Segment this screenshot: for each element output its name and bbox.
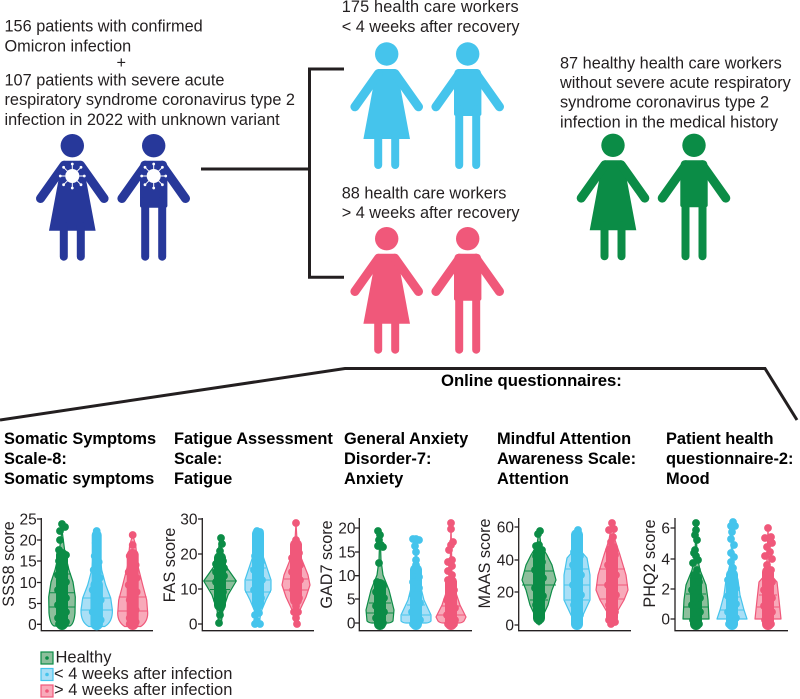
chart: SSS8 violin plot: 15 <box>20 554 37 570</box>
chart: GAD7 violin plot: GAD7 score <box>318 520 336 609</box>
chart: MAAS violin plot: 60 <box>497 520 514 536</box>
heading: fatigue: Fatigue <box>174 470 232 488</box>
chart: FAS violin plot: 0 <box>189 616 198 634</box>
icon: infected woman <box>41 134 104 257</box>
heading: attention: Mindful Attention <box>497 430 631 448</box>
chart: SSS8 violin plot: 20 <box>20 532 37 550</box>
chart: GAD7 violin plot <box>318 518 472 632</box>
trapezoid connector <box>0 368 797 420</box>
heading: mood: Patient health <box>666 430 773 448</box>
chart: SSS8 violin plot: 25 <box>20 512 37 528</box>
icon: green man <box>662 134 726 256</box>
chart: FAS violin plot <box>161 512 314 634</box>
text: recent recovery group: < 4 weeks after recovery <box>342 18 520 36</box>
chart: GAD7 violin plot: 20 <box>338 520 356 538</box>
icon: light blue man <box>436 42 500 165</box>
chart: PHQ2 violin plot: 0 <box>661 612 670 628</box>
legend item: healthy: Healthy <box>56 649 112 667</box>
legend <box>41 649 232 699</box>
chart: GAD7 violin plot: 0 <box>347 616 356 632</box>
text: infected patients description: respiratory syndrome coronavirus type 2 <box>4 91 295 109</box>
chart: GAD7 violin plot: 5 <box>347 592 356 608</box>
icon: pink man <box>436 227 500 350</box>
chart: FAS violin plot: 10 <box>180 582 198 598</box>
heading: online questionnaires: Online questionnaires: <box>441 371 622 390</box>
chart: GAD7 violin plot: 10 <box>338 568 356 585</box>
text: healthy group: syndrome coronavirus type 2 <box>560 94 769 112</box>
heading: mood: questionnaire-2: <box>666 450 794 468</box>
bracket connector <box>201 69 344 277</box>
legend item: under 4 weeks: < 4 weeks after infection <box>54 665 232 683</box>
chart: PHQ2 violin plot <box>641 518 788 631</box>
chart: MAAS violin plot: 0 <box>505 618 514 634</box>
chart: MAAS violin plot <box>476 518 631 634</box>
heading: fatigue: Scale: <box>174 450 222 468</box>
heading: anxiety: Anxiety <box>344 470 404 488</box>
heading: attention: Awareness Scale: <box>497 450 636 468</box>
text: infected patients description: + <box>116 54 126 72</box>
text: infected patients description: 107 patients with severe acute <box>4 72 224 90</box>
chart: MAAS violin plot: MAAS score <box>476 519 494 608</box>
icon: green woman <box>581 134 645 256</box>
text: healthy group: without severe acute respiratory <box>559 74 792 92</box>
chart: SSS8 violin plot: 0 <box>28 617 37 634</box>
chart: SSS8 violin plot: 10 <box>20 575 37 592</box>
legend item: over 4 weeks: > 4 weeks after infection <box>54 681 232 699</box>
chart: FAS violin plot: 20 <box>180 546 198 564</box>
chart: FAS violin plot: FAS score <box>161 528 179 602</box>
heading: mood: Mood <box>666 470 710 488</box>
chart: SSS8 violin plot <box>0 512 153 634</box>
chart: SSS8 violin plot: 5 <box>28 596 37 613</box>
chart: PHQ2 violin plot: PHQ2 score <box>641 519 659 608</box>
chart: FAS violin plot: 30 <box>180 512 198 528</box>
icon: pink woman <box>355 227 418 350</box>
text: infected patients description: infection in 2022 with unknown variant <box>4 111 280 129</box>
heading: fatigue: Fatigue Assessment <box>174 430 333 448</box>
chart: SSS8 violin plot: SSS8 score <box>0 521 18 607</box>
text: infected patients description: 156 patients with confirmed <box>4 18 203 36</box>
text: infected patients description: Omicron infection <box>4 38 131 56</box>
heading: attention: Attention <box>497 470 569 488</box>
icon: infected man <box>122 134 186 257</box>
heading: somatic symptoms: Scale-8: <box>4 450 67 468</box>
icon: light blue woman <box>355 42 418 165</box>
chart: MAAS violin plot: 40 <box>497 552 514 570</box>
text: healthy group: 87 healthy health care workers <box>560 54 782 72</box>
chart: PHQ2 violin plot: 4 <box>661 552 670 568</box>
heading: anxiety: General Anxiety <box>344 430 469 448</box>
chart: GAD7 violin plot: 15 <box>338 544 356 562</box>
text: healthy group: infection in the medical history <box>560 113 779 131</box>
chart: MAAS violin plot: 20 <box>497 584 514 602</box>
text: later recovery group: > 4 weeks after recovery <box>342 204 520 222</box>
heading: somatic symptoms: Somatic symptoms <box>4 470 154 488</box>
heading: anxiety: Disorder-7: <box>344 450 431 468</box>
chart: PHQ2 violin plot: 6 <box>661 520 670 538</box>
text: later recovery group: 88 health care workers <box>342 184 506 202</box>
chart: PHQ2 violin plot: 2 <box>661 582 670 598</box>
heading: somatic symptoms: Somatic Symptoms <box>4 430 156 448</box>
